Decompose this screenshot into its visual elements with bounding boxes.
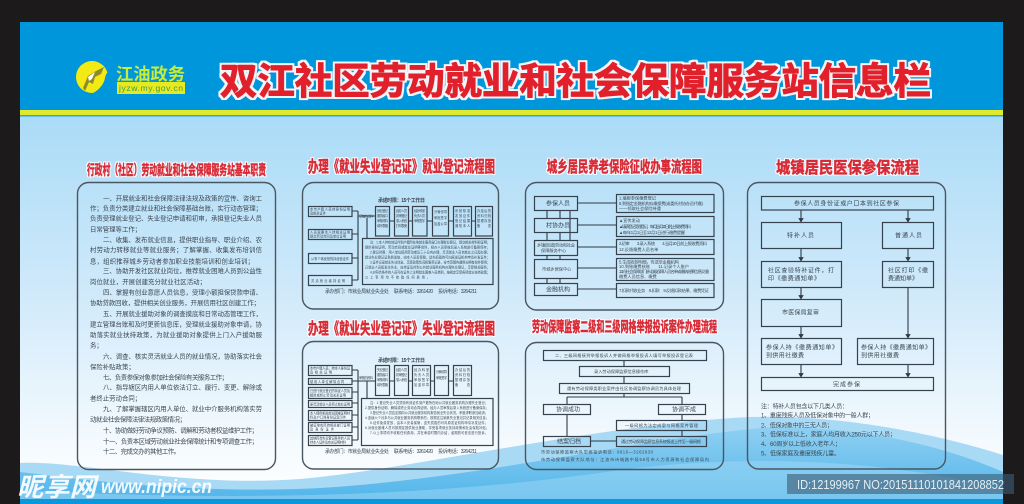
process step boxes: 资料归档 xyxy=(477,213,491,218)
applicant document boxes: 原灵活就业人员停止就业证明 xyxy=(310,402,350,406)
duties text: 二、收集、发布就业信息，提供职业指导、职业介绍、农 xyxy=(103,235,263,244)
logo name: 江油政务 xyxy=(116,65,185,84)
applicant document boxes: 被征地农民持相关部门证明 xyxy=(310,422,350,428)
heading: 劳动保障监察二级和三级网格举报投诉案件办理流程 xyxy=(532,318,717,336)
background gradient panel xyxy=(20,116,1003,500)
applicant document boxes: 被用人单位解除合同 xyxy=(310,379,344,384)
applicant document boxes: 其他符合失业登记条件的人员 xyxy=(310,436,350,440)
flow boxes: 二、三级网格接到举报投诉人并做网格举报投诉人填写举报投诉登记表 xyxy=(555,352,694,359)
hotline and address: 市劳动保障监察大队地址：江油市诗城路中段58号市人力资源和社会保障局内 xyxy=(541,456,709,463)
step detail boxes xyxy=(616,194,714,298)
process step boxes xyxy=(376,366,472,396)
role boxes: 参保人员 xyxy=(546,200,570,208)
title: 双江社区劳动就业和社会保障服务站信息栏 xyxy=(220,61,931,102)
applicant document boxes: 及相关证件 xyxy=(310,210,327,216)
process step boxes: 办结后的 xyxy=(477,208,491,213)
process step boxes: 分管领导 xyxy=(436,369,447,374)
heading: 办理《就业失业登记证》失业登记流程图 xyxy=(308,319,495,338)
flow boxes: 到供用社缴费 xyxy=(861,352,899,360)
process step boxes: 负责人员 xyxy=(414,213,425,218)
duties text: 村劳动力转移就业等就业服务；了解掌握、收集发布培训信 xyxy=(90,245,263,254)
notes box: 注：1.本人持有效证件到户籍所在地就业服务窗口办理就业登记，提交相关材料和证明； xyxy=(370,240,490,244)
flow boxes: 遇有劳动保障类职业案件由社区协调监察协调员为具体处理 xyxy=(567,385,682,392)
notes box: 2.登记时限：用人单位招用劳动者后三十日内办理，灵活就业人员自就业之日起办理； xyxy=(370,250,490,254)
step detail boxes: 5.生成收款明细，传送至金融机构 xyxy=(619,258,679,266)
process step boxes: 分管领导 xyxy=(434,209,447,214)
step detail boxes: ▲填表登记受理登记，每月(当月20日前)上报收费资料 xyxy=(619,223,692,230)
applicant document boxes: 本人提供相关就业困难证明材 xyxy=(310,410,351,416)
process step boxes: 经办科室 xyxy=(414,367,429,372)
flow boxes: 一级网格为法定成案与网格案件管理 xyxy=(625,422,699,429)
time limit: 承诺时限：15个工作日 xyxy=(378,357,425,364)
process step boxes: 经办人员 xyxy=(396,208,407,213)
duties text: 息，组织推荐城乡劳动者参加职业技能培训和创业培训； xyxy=(90,256,254,266)
applicant document boxes: 持本人证件及有关证明材料 xyxy=(310,440,347,444)
notes box: 已就业人员如发生失业，应持证及时到公共就业服务机构办理失业登记，享受相关服务； xyxy=(365,264,490,270)
applicant document boxes: 灵活就业者持证明 xyxy=(311,278,345,283)
process step boxes: 通知本人 xyxy=(455,223,471,228)
duties text: 十二、完成交办的其他工作。 xyxy=(103,446,180,456)
applicant document boxes: 及相关证明 xyxy=(310,370,332,374)
notes: 3、低保标准以上，家庭人均月收入250元以下人员； xyxy=(761,430,896,438)
panel frame xyxy=(302,182,498,309)
notes box: 4.对符合条件的人员可在证件上注明就业困难人员类别，按规定享受各项就业扶持政策； xyxy=(370,270,490,274)
process step boxes: 备查 xyxy=(477,223,492,228)
flow boxes: 协调不成 xyxy=(672,406,696,414)
applicant document boxes: 已进行就业登记的持证人员及 xyxy=(310,388,351,393)
panel frame xyxy=(78,182,276,470)
panel: unemployment registration flow xyxy=(302,319,498,469)
process step boxes: 整理存放 xyxy=(477,218,492,223)
flow boxes: 参保人员身份证或户口本到社区参保 xyxy=(794,200,899,208)
notes: 1、重度残疾人员及低保对象中的一般人群； xyxy=(761,412,874,420)
watermark: 昵享网 xyxy=(17,472,100,502)
department and phones: 承办部门：市就业局就业失业处 联系电话：3261420 投诉电话：3264211 xyxy=(325,288,477,295)
process step boxes: 录入系统 xyxy=(396,377,408,382)
notes: 4、60周岁以上低收入老年人； xyxy=(761,440,841,448)
process step boxes: 审批签字 xyxy=(434,215,447,220)
notes box: 以上事项均不收取任何费用。 xyxy=(365,274,430,280)
duties text: 七、负责参保对象参加社会保险有关服务工作； xyxy=(103,372,228,382)
notes box: 5.证件免费发放，由本人妥善保管，遗失损毁的可向原发证机构申请补发证件； xyxy=(370,420,488,425)
panel: basic duties xyxy=(78,162,276,470)
flow boxes: 协调成功 xyxy=(556,406,580,414)
process step boxes: 服务窗口 xyxy=(377,213,388,218)
process step boxes: 打印表册 xyxy=(396,223,408,228)
duties text: 五、开展就业援助对象的调查摸底和日常动态管理工作， xyxy=(103,309,262,318)
step detail boxes: 缴费人员信息、缴费 xyxy=(619,273,657,280)
panel: rural and urban pension flow xyxy=(526,157,724,310)
applicant document boxes: 及身份证件 xyxy=(310,426,335,432)
flow boxes: 通过劳动保障监察信息系统报送上传至一级网格 xyxy=(621,438,702,445)
step detail boxes: ▲每年1月1日至12月1日进行缴费提醒 xyxy=(619,229,686,236)
panel frame xyxy=(302,342,498,469)
connector lines xyxy=(352,370,453,440)
applicant document boxes: 料及户口簿身份证复印件 xyxy=(310,414,347,420)
flow boxes: 普通人员 xyxy=(895,232,922,240)
process step boxes: 审核材料 xyxy=(377,377,389,382)
notes box xyxy=(362,398,493,446)
step detail boxes: 12.反馈缴费人员名单 xyxy=(619,246,658,253)
process step boxes: 审核签字 xyxy=(414,218,425,223)
process step boxes xyxy=(376,206,492,236)
process step boxes: 整理存放 xyxy=(455,377,471,382)
flow boxes: 市医保局复审 xyxy=(782,308,819,316)
flow boxes: 社区查验特补证件，打 xyxy=(768,266,834,274)
process step boxes: 审核材料 xyxy=(377,218,389,223)
process step boxes: 加盖公章 xyxy=(434,221,448,226)
image id bar xyxy=(787,474,1014,494)
panel frame xyxy=(526,182,724,310)
flow boxes xyxy=(544,350,706,446)
notes box: 就业失业登记证免费发放，由本人妥善保管，遗失损毁的可向原发证机构申请补发证件； xyxy=(365,254,490,260)
duties text: 十、协助做好劳动争议预防、调解和劳动者权益维护工作； xyxy=(103,426,258,434)
header rule xyxy=(20,110,1003,116)
watermark xyxy=(17,472,212,502)
duties text: 九、了解掌握辖区内用人单位、就业中介服务机构落实劳 xyxy=(103,404,263,413)
applicant document boxes xyxy=(308,206,352,286)
notes box: 3.登记失业人员应定期向公共就业服务机构报告就业失业状况，积极求职参加培训； xyxy=(370,410,488,415)
duties text: 保险补贴政策； xyxy=(90,362,135,371)
notes box: 6.对就业困难人员可按规定提供就业援助，享受各项就业扶持政策和社会保险补贴； xyxy=(365,425,489,430)
process step boxes: 备查 xyxy=(455,382,471,387)
panel frame xyxy=(526,342,724,470)
duties text: 务； xyxy=(90,340,103,350)
process step boxes: 填写表格 xyxy=(377,382,389,387)
header band xyxy=(20,22,1003,110)
watermark: www.nipic.cn xyxy=(101,477,212,498)
panel frame xyxy=(748,182,946,469)
role boxes: 金融机构 xyxy=(546,286,570,294)
logo url: jyzw.my.gov.cn xyxy=(118,83,183,93)
step detail boxes: 7.扣款代收业务 8.扣款 9.反馈扣款结果、缴费凭证 xyxy=(619,287,710,294)
duties text: 作；负责分类建立就业和社会保障基础台账，实行动态管理； xyxy=(90,203,262,212)
process step boxes: 就业登记 xyxy=(377,208,389,213)
logo: 江油政务 xyxy=(76,61,185,94)
duties text: 动就业社会保障法律法规政策情况； xyxy=(90,414,186,424)
duties text: 六、调查、核实灵活就业人员的就业情况，协助落实社会 xyxy=(103,352,263,360)
step detail boxes: 1.填报参保缴费登记 xyxy=(619,194,657,202)
flow boxes: 参保人持《缴费通知单》 xyxy=(766,344,838,352)
process step boxes: 负责人员 xyxy=(414,372,429,377)
duties text: 一、开展就业和社会保障法律法规及政策的宣传、咨询工 xyxy=(103,193,263,202)
duties text: 三、协助开发社区就业岗位，推荐就业困难人员到公益性 xyxy=(103,266,263,275)
process step boxes: 加盖印章 xyxy=(414,382,430,387)
background waves xyxy=(20,417,1003,504)
heading: 城乡居民养老保险征收办事流程图 xyxy=(547,157,702,176)
duties text: 四、掌握有创业意愿人员信息，受理小额担保贷款申请、 xyxy=(103,288,262,296)
process step boxes: 办结后的 xyxy=(455,367,470,372)
applicant document boxes xyxy=(308,366,352,446)
applicant document boxes: 从事个体经营的持经营证件 xyxy=(311,256,350,261)
arrows xyxy=(801,210,908,377)
duties text: 岗位就业，开展创建充分就业社区活动； xyxy=(90,277,206,286)
heading: 办理《就业失业登记证》就业登记流程图 xyxy=(308,157,495,176)
department and phones: 承办部门：市就业局就业失业处 联系电话：3261420 投诉电话：3264211 xyxy=(325,448,477,455)
applicant document boxes: 提交劳动合同及单位证明 xyxy=(310,234,346,238)
process step boxes: 服务窗口 xyxy=(377,372,388,377)
process step boxes: 录入系统 xyxy=(396,218,408,223)
notes xyxy=(761,402,896,458)
intake label: 审核的资料 xyxy=(359,214,374,218)
connector lines xyxy=(352,211,475,280)
duties text: 者终止劳动合同； xyxy=(90,394,141,402)
duties text: 建立管理台账和及时更新信息库，受理就业援助对象申请，协 xyxy=(90,320,263,328)
notes: 2、低保对象中的三无人员； xyxy=(761,422,833,430)
duties text: 日常管理等工作； xyxy=(90,224,141,234)
notes box: 2.提供身份证明、解除或终止劳动合同证明，经办人员审核后录入系统进行备案保存； xyxy=(365,405,489,410)
duties text: 助落实就业扶持政策，为就业援助对象提供上门入户援助服 xyxy=(90,330,263,339)
role boxes: 乡镇(街道)劳动和社会 xyxy=(537,242,576,248)
step detail boxes: ——领取社会保险待遇 xyxy=(619,205,662,212)
flow boxes: 印《缴费通知单》 xyxy=(768,274,820,282)
step detail boxes: 10.到账缴费核账 11.记录个人账户 xyxy=(619,263,689,270)
applicant document boxes: 人员需要本人持相关证明 xyxy=(310,230,350,234)
step detail boxes: 13.向社会保障部门(市县级保障人员名单或缴纳结果信息反馈) xyxy=(619,268,710,275)
flow boxes: 完成参保 xyxy=(833,380,860,388)
duties text: 协助贷款回收，提供相关创业服务，开展信用社区创建工作； xyxy=(90,298,260,307)
process step boxes: 失业登记 xyxy=(377,367,389,372)
duties text xyxy=(90,193,263,456)
role boxes: 村协办员 xyxy=(546,222,570,230)
panel: labour inspection complaint flow xyxy=(526,318,724,470)
process step boxes: 初审登记 xyxy=(396,372,408,377)
process step boxes: 经办人员 xyxy=(396,367,407,372)
role boxes: 市城乡居保中心 xyxy=(542,266,572,272)
duties text: 十一、负责本区域劳动就业社会保障统计和专项调查工作； xyxy=(103,436,258,446)
duties text: 负责受理就业登记、失业登记申请和初审，承担登记失业人员 xyxy=(90,213,262,222)
process step boxes: 审核签字 xyxy=(414,377,429,382)
flow boxes xyxy=(762,196,934,390)
notes: 5、低保家庭及重度残疾儿童。 xyxy=(761,450,840,458)
process step boxes: 审批签字 xyxy=(436,375,447,380)
flow boxes: 结案归档 xyxy=(557,438,581,446)
flow boxes: 录入劳动保障监察信息操作库 xyxy=(594,368,648,375)
notes box xyxy=(362,238,493,284)
duties text: 八、指导辖区内用人单位依法订立、履行、变更、解除或 xyxy=(103,382,263,392)
step detail boxes: 2.初审 3.录入系统 4.当月20日前上报收费资料 xyxy=(619,240,708,247)
notes: 注：特补人员包含以下几类人员： xyxy=(761,402,848,410)
notes box: 注：1.登记失业人员须持有效证件到户籍所在地公共就业服务机构办理失业登记； xyxy=(370,400,488,405)
step detail boxes: ▲宣传发动 xyxy=(619,217,640,224)
panel: medical insurance flow xyxy=(748,158,946,469)
process step boxes: 登记结果 xyxy=(455,218,471,223)
time limit: 承诺时限：15个工作日 xyxy=(378,197,425,204)
hotline and address: 市劳动保障监察大队举报投诉电话：0816—3262930 xyxy=(541,448,654,456)
process step boxes: 系统核准 xyxy=(455,208,471,213)
notes box: 提供身份证明、劳动合同或就业证明等资料，经办人员审核后录入系统进行备案保存； xyxy=(365,244,490,250)
process step boxes: 资料归档 xyxy=(455,372,470,377)
flow boxes: 费通知单》 xyxy=(888,274,918,282)
applicant document boxes: 本市户籍人员，持本人身份证 xyxy=(310,366,351,370)
flow boxes: 参保人持《缴费通知单》 xyxy=(861,344,931,352)
hotline and address xyxy=(541,448,709,463)
role boxes: 保障服务中心 xyxy=(541,247,567,254)
applicant document boxes: 本市户籍人员持身份证明 xyxy=(310,206,350,212)
flow boxes: 到供用社缴费 xyxy=(766,352,804,360)
notes box: 4.连续六个月未与公共就业服务机构联系的，按规定注销其失业登记并记录相关信息； xyxy=(365,415,489,420)
connector lines xyxy=(567,360,682,441)
intake label: 审核的资料 xyxy=(359,375,374,380)
step detail boxes: 8.到指定金融机构存缴保费(或委托村协办员代缴) xyxy=(619,200,704,207)
flow boxes: 特补人员 xyxy=(787,232,814,240)
icon: logo emblem xyxy=(76,61,109,93)
connector lines xyxy=(547,203,616,289)
process step boxes: 填写表格 xyxy=(377,223,389,228)
applicant document boxes: 解除或终止劳动关系证明 xyxy=(310,392,346,398)
heading: 城镇居民医保参保流程 xyxy=(776,158,919,177)
process step boxes: 初审登记 xyxy=(396,213,408,218)
notes box: 7.以上事项均不收取任何费用，并在承诺时限内办结，逾期的可依法进行投诉。 xyxy=(370,430,488,435)
process step boxes: 发放证件 xyxy=(455,213,471,218)
process step boxes: 经办科室 xyxy=(414,208,425,213)
role boxes xyxy=(534,196,578,296)
flow boxes: 社区打印《缴 xyxy=(888,266,928,274)
heading: 行政村（社区）劳动就业和社会保障服务站基本职责 xyxy=(87,162,266,178)
notes box: 3.证件记录就业失业信息、享受政策情况和服务记录，全市范围内通用长期有效并使用； xyxy=(370,260,490,264)
panel: employment registration flow xyxy=(302,157,498,309)
